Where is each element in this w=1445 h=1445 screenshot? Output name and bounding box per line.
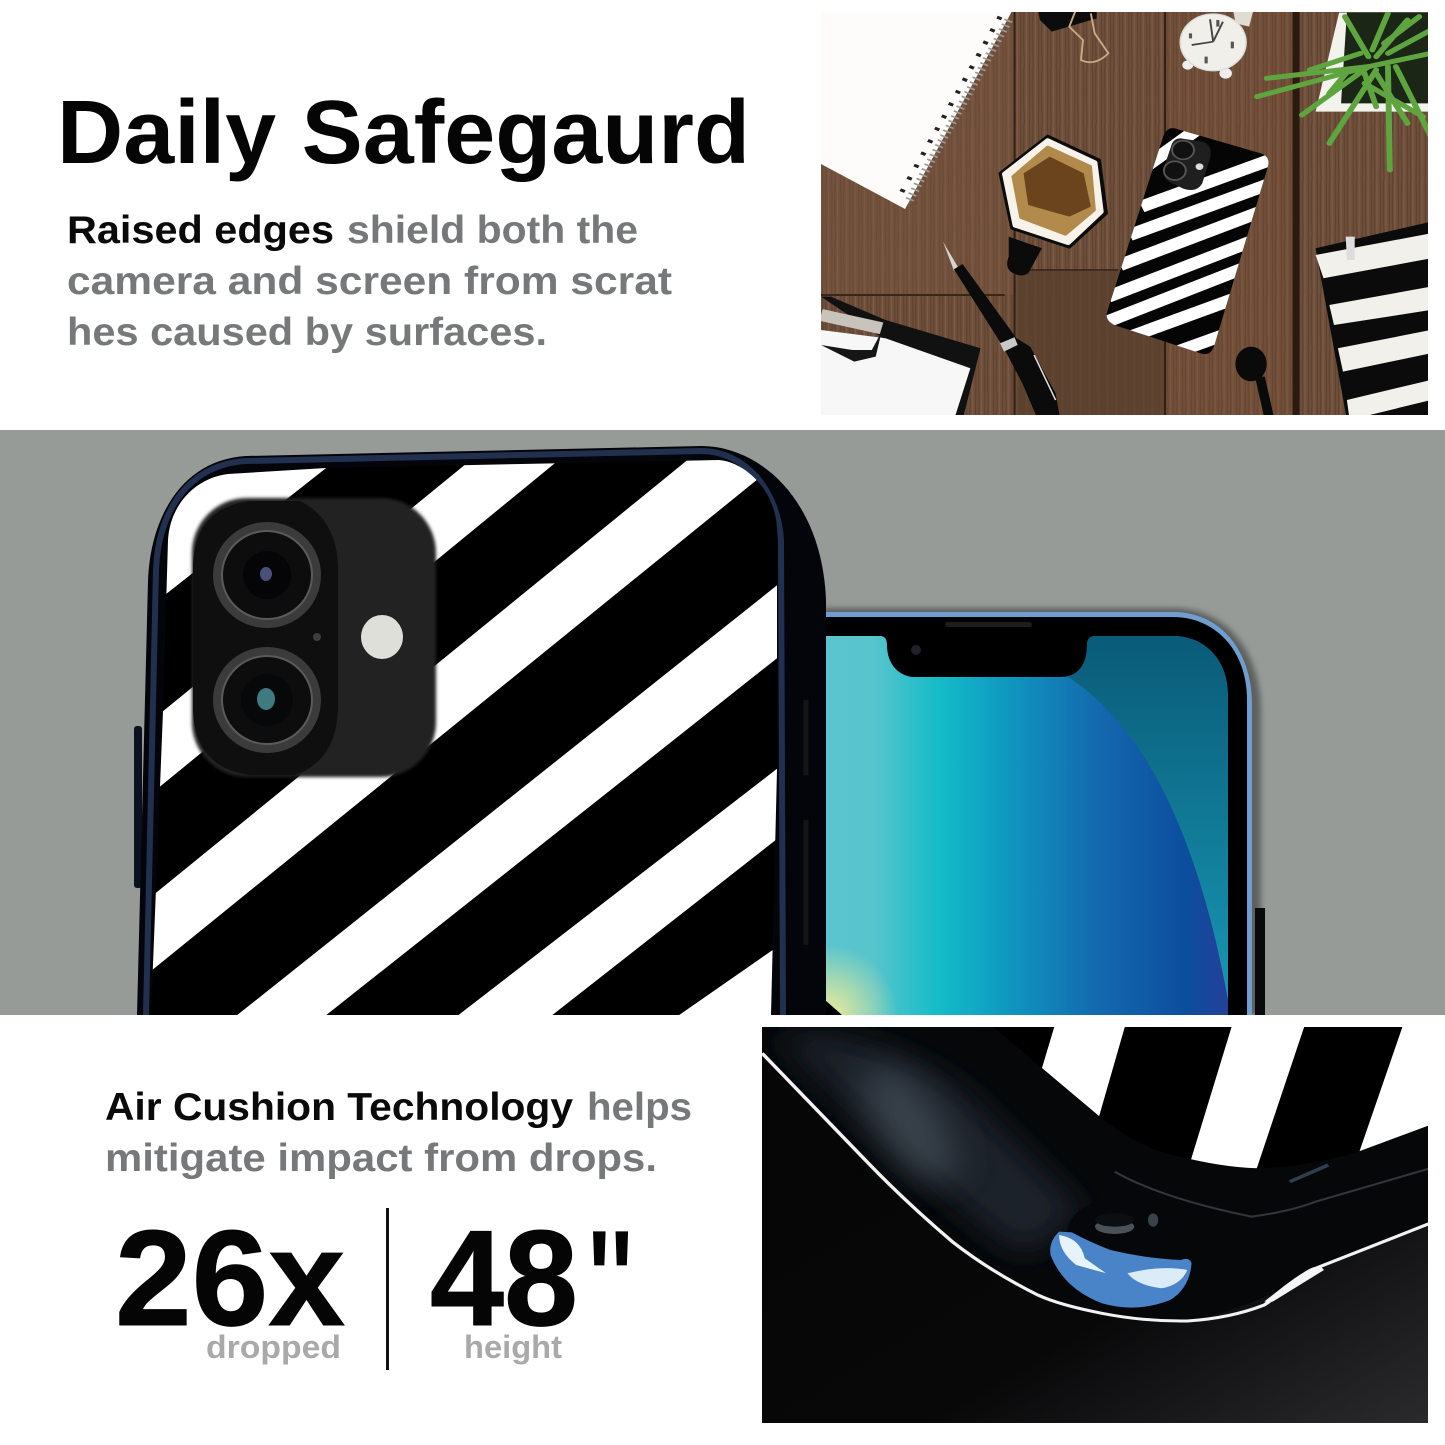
case back stripes: [151, 460, 777, 1015]
lens lower: [213, 647, 321, 753]
water drop: [1050, 1198, 1192, 1308]
text block: raised edges description: camera and screen from scrat: [67, 260, 672, 303]
text block: raised edges description: Raised edges: [67, 209, 334, 252]
miniature phone case: [1099, 128, 1275, 354]
pen: [943, 242, 1060, 420]
side button: [1255, 908, 1265, 1015]
stat: 48 inch height: 48: [430, 1202, 578, 1354]
stat: 48 inch height: '': [588, 1202, 633, 1354]
bumper edge highlights: [1115, 1168, 1430, 1217]
screen wallpaper: [825, 630, 1228, 1015]
text block: air cushion description: [105, 1086, 692, 1180]
text block: air cushion description: helps: [587, 1086, 692, 1129]
clipboard: [821, 297, 981, 420]
band background: [0, 430, 1445, 1015]
flash: [361, 615, 403, 659]
stat: 26x dropped: 26x: [115, 1202, 345, 1354]
panel: desk lifestyle photo: [821, 10, 1431, 420]
text block: raised edges description: hes caused by surfaces.: [67, 311, 547, 354]
coffee mug: [1000, 136, 1106, 275]
front phone with screen: [820, 608, 1265, 1015]
panel: air cushion close-up photo: [760, 1025, 1431, 1425]
text block: raised edges description: [67, 209, 672, 354]
camera module: [192, 498, 436, 777]
binder clip: [1038, 10, 1108, 62]
speaker: [945, 622, 1032, 627]
selfie camera: [911, 645, 921, 655]
rear phone case with stripes: [100, 440, 826, 1020]
spiral notebook: [821, 10, 1013, 209]
panel: grey band with phones: [0, 430, 1445, 1020]
lens upper: [213, 522, 321, 628]
title: Daily Safegaurd: [57, 83, 750, 183]
stat: 48 inch height: [430, 1202, 633, 1365]
text block: air cushion description: Air Cushion Technology: [105, 1086, 573, 1129]
microphone: [313, 633, 321, 641]
stat: 26x dropped: dropped: [206, 1329, 341, 1365]
divider: [386, 1208, 389, 1370]
text block: raised edges description: shield both the: [347, 209, 638, 252]
white rim line: [762, 1053, 1430, 1321]
bumper frame: [1174, 1170, 1428, 1320]
alarm clock: [1180, 12, 1253, 79]
spoon: [1235, 347, 1275, 420]
potted plant: [1257, 13, 1431, 170]
text block: air cushion description: mitigate impact from drops.: [105, 1137, 657, 1180]
left side buttons: [134, 726, 142, 888]
stat: 48 inch height: height: [464, 1329, 562, 1365]
wood desk: [821, 10, 1431, 420]
right side button shading: [804, 700, 808, 945]
dark background: [760, 1025, 1431, 1425]
stripes on case edge: [1042, 1027, 1428, 1168]
striped notebook: [1316, 222, 1431, 420]
